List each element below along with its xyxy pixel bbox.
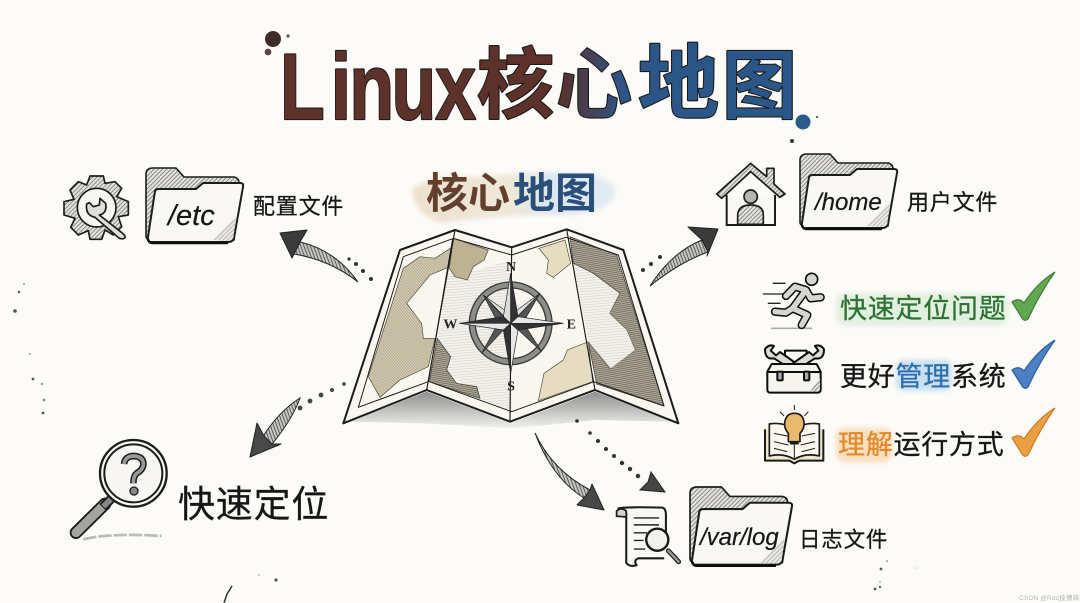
arrow to logs (dotted) <box>575 419 665 492</box>
icon: orange check <box>1012 408 1055 456</box>
compass rose <box>459 273 563 373</box>
arrow to /etc <box>280 230 373 282</box>
label: log files: 日志文件 <box>799 528 888 552</box>
folder label: /etc: /etc <box>166 200 215 232</box>
benefit row: locate problems <box>763 272 1055 328</box>
icon: gear with wrench <box>64 176 128 239</box>
text: locate problems quickly: 快速定位问题 <box>840 294 1006 324</box>
map land: panel three top <box>539 240 571 277</box>
compass letters: W <box>443 317 457 332</box>
map land: panel three bottom <box>538 342 593 401</box>
central folded map <box>343 229 678 428</box>
map shadow <box>350 392 673 428</box>
quick locate group <box>76 440 329 539</box>
title: 地 <box>638 40 719 130</box>
title <box>265 31 818 143</box>
/var/log group <box>617 487 888 566</box>
folder label: /var/log: /var/log <box>698 524 779 551</box>
title: Linux <box>280 34 476 139</box>
subtitle <box>426 170 597 217</box>
map land: panel four <box>570 237 664 406</box>
arrow to quick locate <box>250 382 346 457</box>
/etc group <box>64 168 344 243</box>
icon: home folder <box>800 154 897 229</box>
text: better system management: 更好管理系统 <box>840 362 1006 392</box>
title: 图 <box>722 44 797 128</box>
icon: open book with light bulb <box>765 405 823 463</box>
subtitle: 地图 <box>513 170 597 217</box>
folder label: /home: /home <box>813 189 882 216</box>
map land: panel two bottom <box>429 338 480 398</box>
icon: magnifier with question mark <box>76 440 167 539</box>
compass letters <box>443 260 576 395</box>
benefit row: manage system <box>765 340 1055 393</box>
compass letters: E <box>567 317 576 332</box>
arrow to logs (solid) <box>535 433 604 510</box>
map panel four light shading <box>573 264 635 368</box>
benefit row: understand operation <box>765 405 1055 463</box>
label: quick locate: 快速定位 <box>178 484 329 525</box>
label: user files: 用户文件 <box>907 190 998 215</box>
icon: house with person <box>717 163 785 225</box>
map outlines <box>343 229 678 423</box>
compass letters: N <box>506 260 516 275</box>
icon: etc folder <box>146 168 243 243</box>
title: 心 <box>556 44 632 129</box>
text: understand how it runs: 理解运行方式 <box>838 430 1004 460</box>
map paper <box>343 229 678 423</box>
highlight: green wash <box>836 293 1008 326</box>
icon: blue check <box>1012 340 1055 388</box>
highlight: orange wash <box>836 428 892 462</box>
background ink specks <box>13 283 918 603</box>
map land: panel two top <box>449 238 488 280</box>
map land: panel two shading <box>433 260 512 412</box>
title: 核 <box>477 43 554 129</box>
highlight: blue wash <box>896 360 952 391</box>
icon: toolbox with wrenches <box>765 345 824 393</box>
title ink splatters <box>265 31 818 143</box>
subtitle: 核心 <box>426 170 510 217</box>
benefits list <box>763 272 1055 463</box>
compass letters: S <box>507 380 515 395</box>
subtitle watercolor wash <box>412 173 615 223</box>
label: config files: 配置文件 <box>253 194 344 219</box>
map land: left panel <box>368 247 452 397</box>
icon: green check <box>1012 272 1055 320</box>
/home group <box>717 154 998 229</box>
icon: scroll with magnifier <box>617 507 679 566</box>
arrow to /home <box>641 227 718 286</box>
icon: running person <box>763 273 821 328</box>
icon: log folder <box>690 487 792 566</box>
